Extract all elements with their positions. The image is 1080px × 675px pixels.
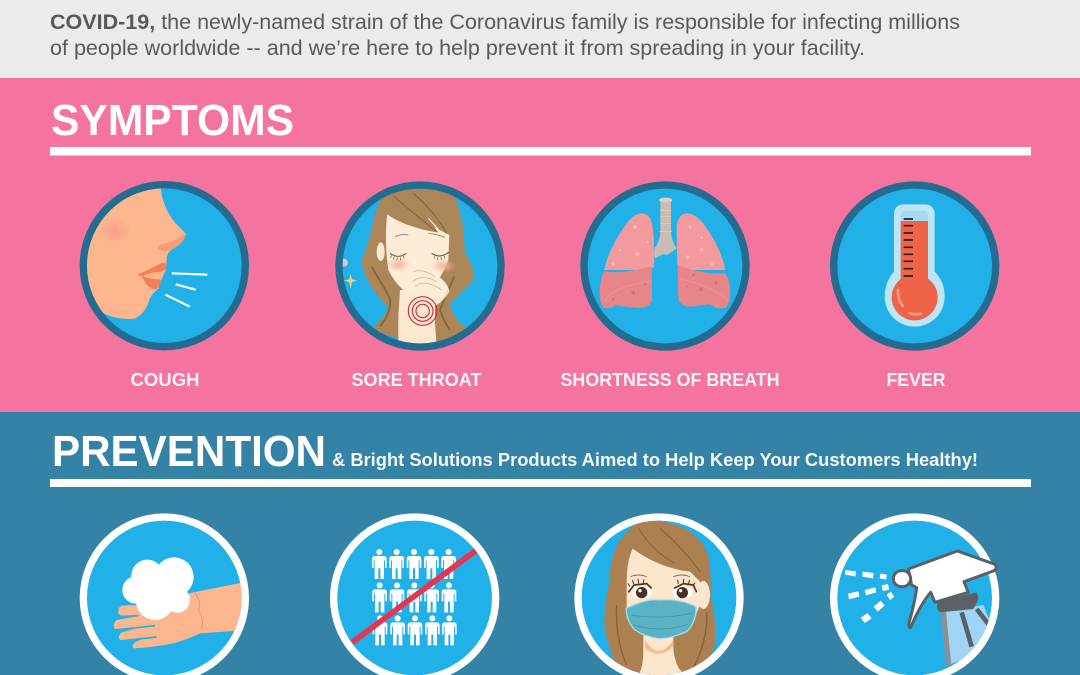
icon: no crowds bbox=[334, 517, 496, 675]
icon: thermometer bbox=[834, 185, 996, 347]
label: fever: FEVER bbox=[886, 370, 946, 390]
icon: lungs bbox=[584, 185, 746, 347]
icon: sore throat bbox=[339, 185, 501, 347]
panel: prevention bbox=[0, 412, 1080, 675]
subheading: bright solutions: & Bright Solutions Products Aimed to Help Keep Your Customers Healthy! bbox=[332, 450, 978, 470]
panel: symptoms bbox=[0, 78, 1080, 412]
text: intro line 2: of people worldwide -- and we’re here to help prevent it from spreading in your facility. bbox=[50, 37, 865, 60]
icon: spray bottle bbox=[834, 517, 1000, 675]
label: sore throat: SORE THROAT bbox=[352, 370, 482, 390]
icon: cough bbox=[77, 183, 245, 347]
icon: hand washing bbox=[83, 517, 247, 675]
text: intro line 1: COVID-19, the newly-named strain of the Coronavirus family is responsible for infecting millions bbox=[50, 11, 960, 34]
label: shortness of breath: SHORTNESS OF BREATH bbox=[560, 370, 780, 390]
heading: symptoms: SYMPTOMS bbox=[51, 96, 294, 145]
heading: prevention: PREVENTION bbox=[52, 427, 326, 476]
icon: face mask bbox=[578, 517, 740, 675]
panel: intro bbox=[0, 0, 1080, 78]
label: cough: COUGH bbox=[130, 370, 200, 390]
